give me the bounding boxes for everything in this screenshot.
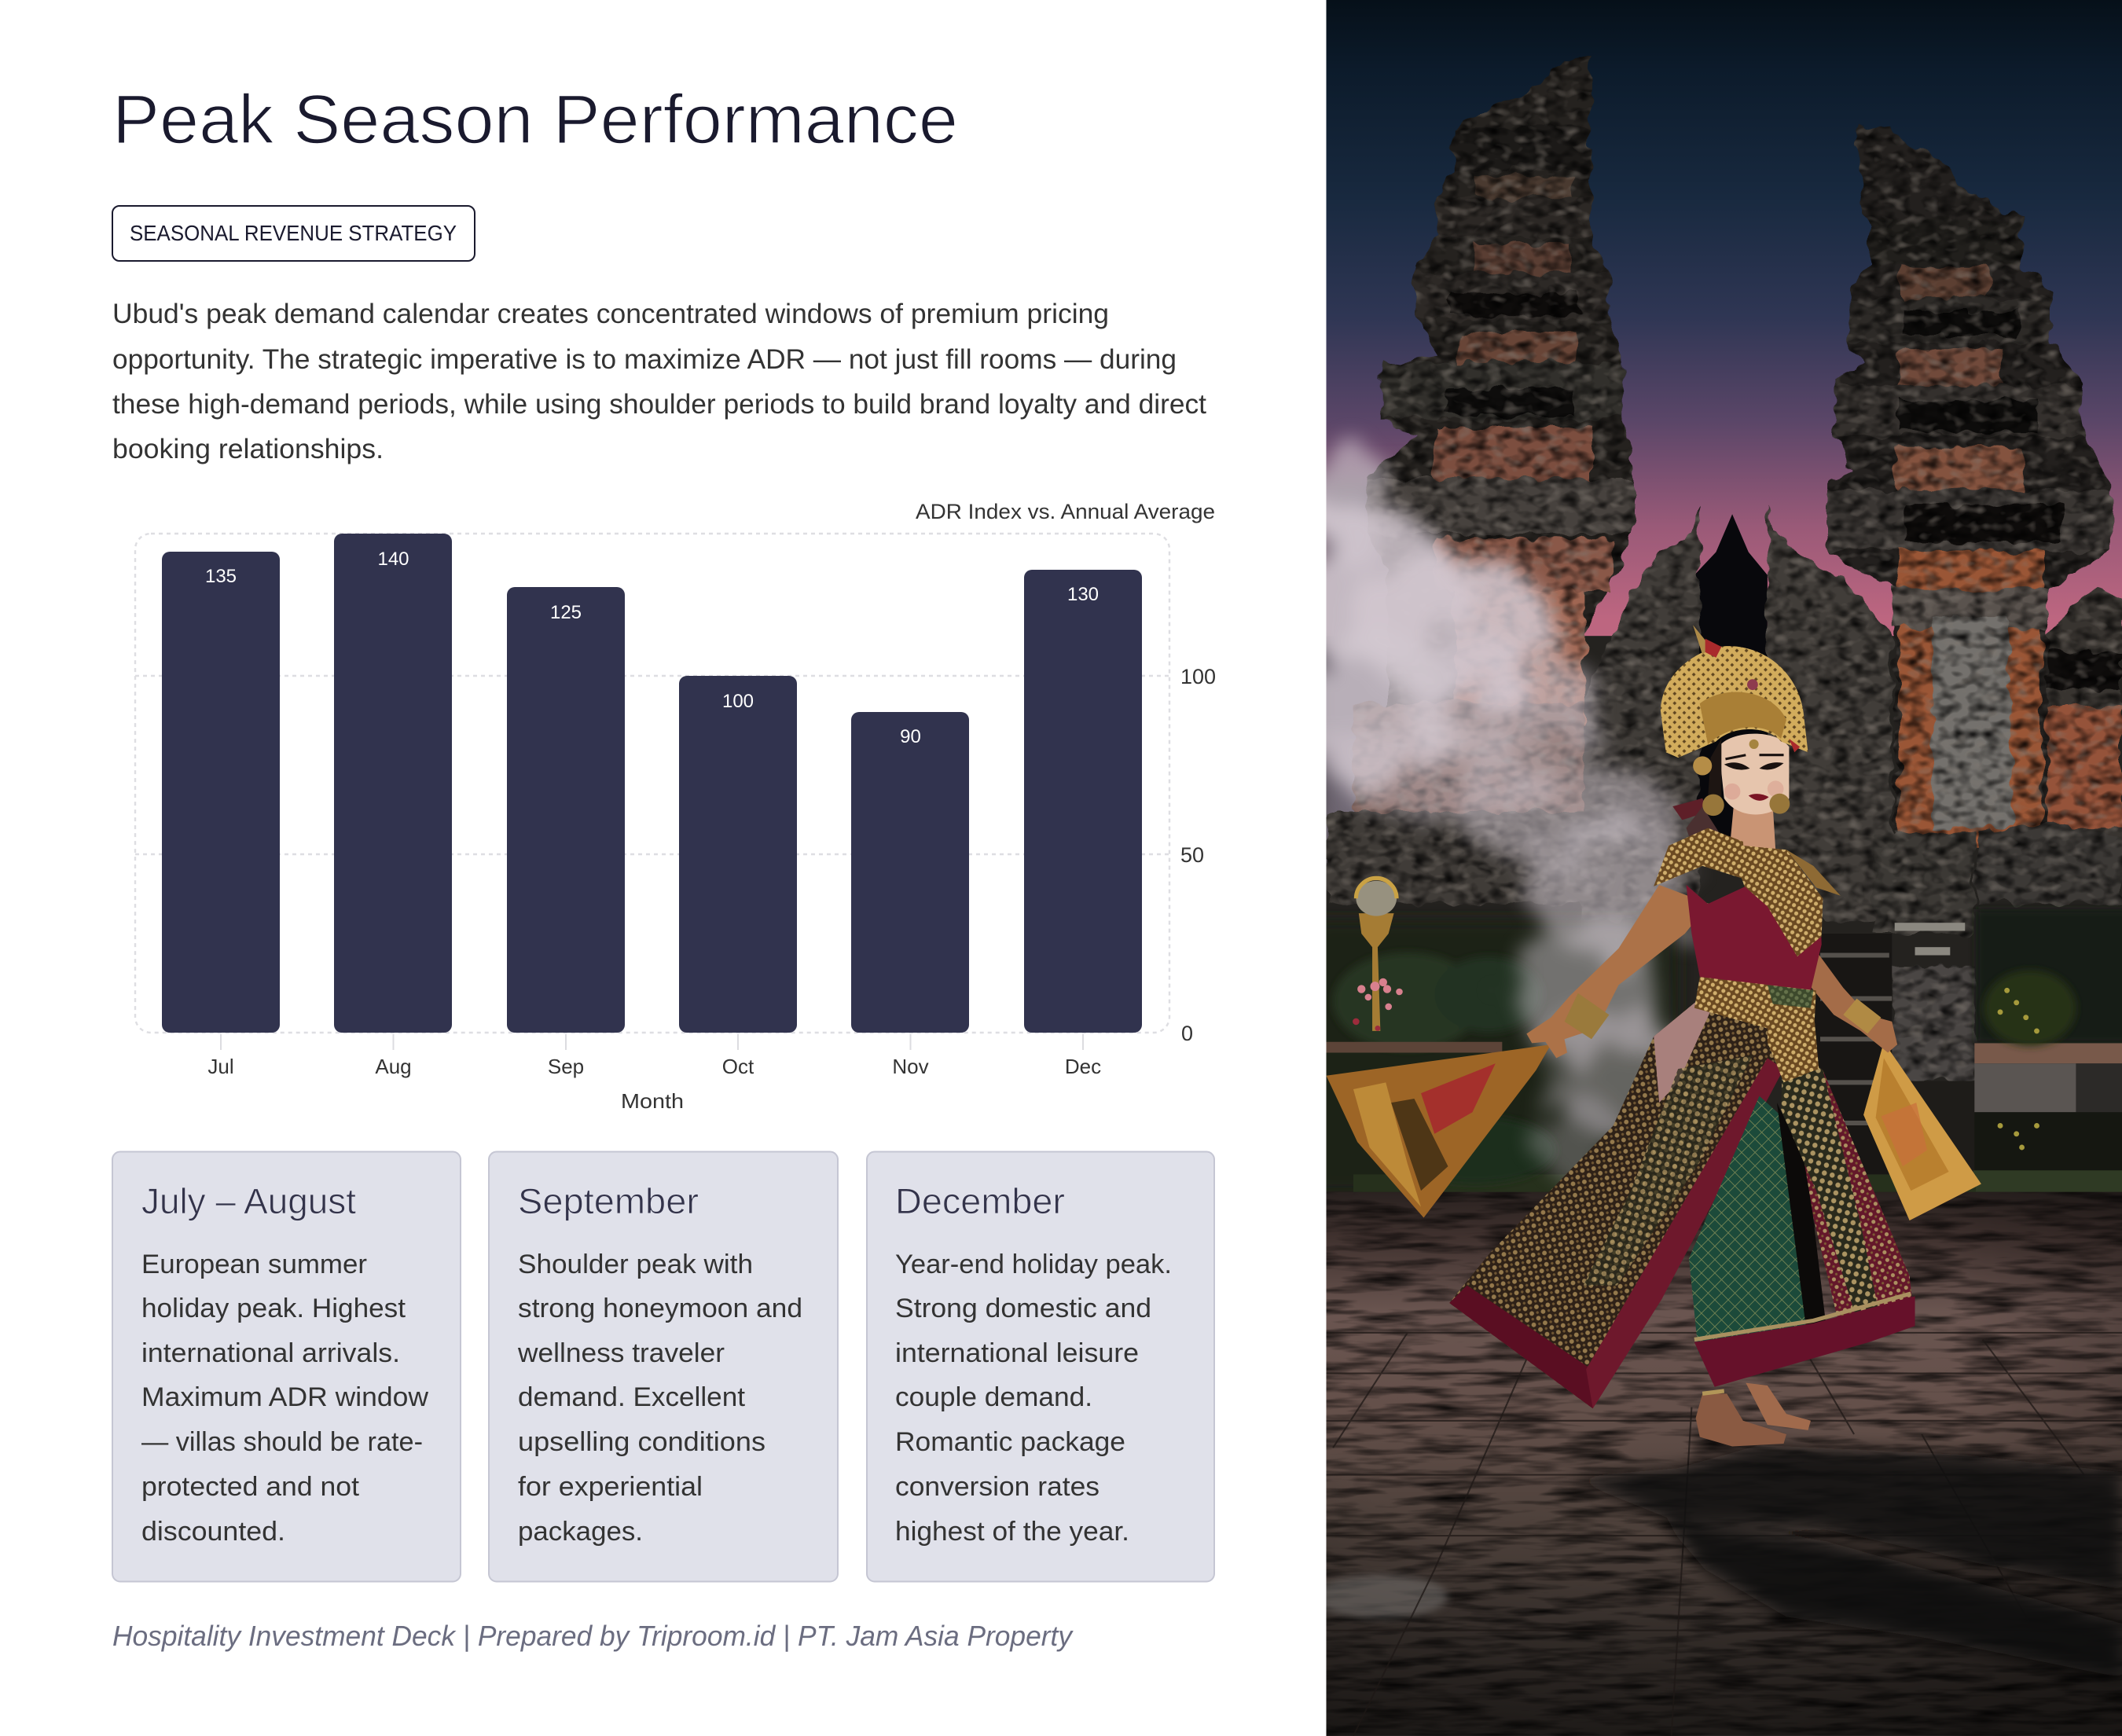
badge: seasonal revenue strategy: SEASONAL REVENUE STRATEGY: [130, 221, 457, 245]
bangles: [1565, 993, 1609, 1039]
card: December: couple demand.: [895, 1382, 1092, 1412]
bar: Aug 140: [334, 534, 452, 1033]
card: September: Shoulder peak with: [518, 1250, 753, 1279]
bar: Dec 130: [1024, 570, 1142, 1033]
card: September: strong honeymoon and: [518, 1294, 802, 1323]
card: September: for experiential: [518, 1472, 703, 1502]
stone courtyard floor: [1312, 1192, 2122, 1736]
right tower silhouette: [1827, 124, 2111, 849]
garden wall upper stones: [1327, 812, 2122, 1081]
hip ornament: [1768, 1008, 1819, 1082]
bar chart: ADR index by month: [135, 534, 1216, 1113]
chart frame and gridlines: [135, 534, 1169, 1033]
bar: Nov 90: 90: [900, 726, 921, 747]
left tower silhouette: [1367, 56, 1633, 866]
card: July – August: protected and not: [141, 1472, 359, 1502]
left arm: [1526, 885, 1709, 1058]
left tower tiers: [1453, 127, 1589, 171]
card: September: wellness traveler: [517, 1338, 725, 1368]
x axis labels: Jul: [207, 1055, 234, 1078]
photo panel: Balinese dancer in front of temple gate: [1279, 0, 2122, 1736]
dark gap in skirt: [1777, 1103, 1827, 1333]
front skirt hem: [1449, 1286, 1593, 1408]
neck: [1730, 806, 1775, 850]
green under skirt: [1689, 1096, 1813, 1353]
bar: Sep 125: [507, 587, 625, 1033]
right skirt panel: [1784, 1037, 1915, 1342]
y axis labels: 100: [1180, 665, 1216, 688]
badge: seasonal revenue strategy: [112, 206, 475, 261]
card: September: packages.: [518, 1517, 643, 1547]
footer note: Hospitality Investment Deck | Prepared by Triproom.id | PT. Jam Asia Property: [112, 1620, 1074, 1652]
pink flowers and golden lamp: [1327, 878, 1502, 1052]
bar: Dec 130: 130: [1067, 584, 1099, 605]
x axis labels: Dec: [1065, 1055, 1101, 1078]
intro paragraph: these high-demand periods, while using shoulder periods to build brand loyalty and direct: [112, 389, 1206, 420]
hair and ribbon: [1672, 798, 1708, 820]
x axis labels: Aug: [375, 1055, 412, 1078]
intro paragraph: Ubud's peak demand calendar creates concentrated windows of premium pricing: [112, 299, 1109, 329]
card: December: December: [895, 1181, 1065, 1221]
bar: Aug 140: 140: [377, 549, 409, 570]
card: December: international leisure: [895, 1338, 1139, 1368]
card: July – August: discounted.: [141, 1517, 285, 1547]
bodice: [1687, 885, 1822, 990]
intro paragraph: booking relationships.: [112, 434, 384, 464]
bar: Jul 135: [162, 552, 280, 1033]
green sash inside skirt: [1584, 1055, 1753, 1286]
belt: [1694, 977, 1816, 1042]
temple stone masonry: [1353, 56, 2122, 920]
title: Peak Season Performance: [112, 80, 958, 158]
far right gate: [2045, 586, 2122, 838]
shoulder capes: [1654, 828, 1746, 886]
card: September: [489, 1152, 838, 1581]
card: December: Strong domestic and: [895, 1294, 1151, 1323]
card: December: conversion rates: [895, 1472, 1100, 1502]
card: September: September: [518, 1181, 699, 1221]
card: December: [867, 1152, 1214, 1581]
card: July – August: Maximum ADR window: [141, 1382, 428, 1412]
y axis labels: 0: [1181, 1022, 1193, 1045]
crown: [1661, 625, 1808, 758]
card: July – August: [112, 1152, 461, 1581]
intro paragraph: [112, 299, 1206, 464]
middle gate right wing: [1768, 508, 1892, 920]
x axis labels: Oct: [722, 1055, 754, 1078]
card: December: Year-end holiday peak.: [895, 1250, 1172, 1279]
sky: [1327, 0, 2122, 703]
card: December: Romantic package: [895, 1427, 1125, 1457]
carved stone panel: [1933, 617, 2013, 831]
smoke: [1279, 440, 1691, 1180]
card: July – August: — villas should be rate-: [141, 1427, 423, 1457]
center dark gate: [1694, 514, 1768, 866]
middle gate left wing: [1584, 508, 1700, 920]
face: [1708, 734, 1789, 814]
gold chest piece: [1730, 844, 1823, 956]
bar: Sep 125: 125: [550, 602, 582, 623]
card: July – August: holiday peak. Highest: [141, 1294, 406, 1323]
right garden: dark wall, planter and foliage: [1312, 909, 2122, 1194]
x axis labels: Sep: [548, 1055, 584, 1078]
x axis labels: Nov: [892, 1055, 929, 1078]
intro paragraph: opportunity. The strategic imperative is to maximize ADR — not just fill rooms — during: [112, 344, 1177, 375]
earrings: [1702, 795, 1724, 816]
card: July – August: European summer: [141, 1250, 367, 1279]
card: September: upselling conditions: [518, 1427, 765, 1457]
y axis labels: 50: [1180, 843, 1204, 867]
pale drape at waist: [1654, 999, 1712, 1103]
cast shadow on floor: [1567, 1445, 2122, 1678]
card: December: highest of the year.: [895, 1517, 1129, 1547]
dancer: [1327, 625, 1981, 1446]
y axis labels: [1180, 665, 1216, 1045]
feet: [1696, 1393, 1786, 1446]
left garden foliage: [1333, 952, 1556, 1184]
card: July – August: international arrivals.: [141, 1338, 400, 1368]
lower hem: [1694, 1296, 1915, 1387]
right arm: [1803, 947, 1897, 1052]
card: September: demand. Excellent: [518, 1382, 745, 1412]
bar: Oct 100: [679, 676, 797, 1033]
chart title: ADR Index vs. Annual Average: [916, 500, 1215, 523]
right tower tiers: [2021, 251, 2023, 260]
x axis title: Month: [621, 1089, 684, 1113]
card: July – August: July – August: [141, 1181, 357, 1221]
front skirt: [1449, 999, 1777, 1408]
lower backdrop: [1327, 636, 2122, 1204]
x axis labels: [207, 1055, 1101, 1078]
bar: Oct 100: 100: [722, 691, 754, 712]
right scarf: [1863, 1042, 1981, 1220]
bar: Jul 135: 135: [205, 566, 237, 587]
bar: Nov 90: [851, 712, 969, 1033]
left scarf: [1327, 1044, 1551, 1218]
